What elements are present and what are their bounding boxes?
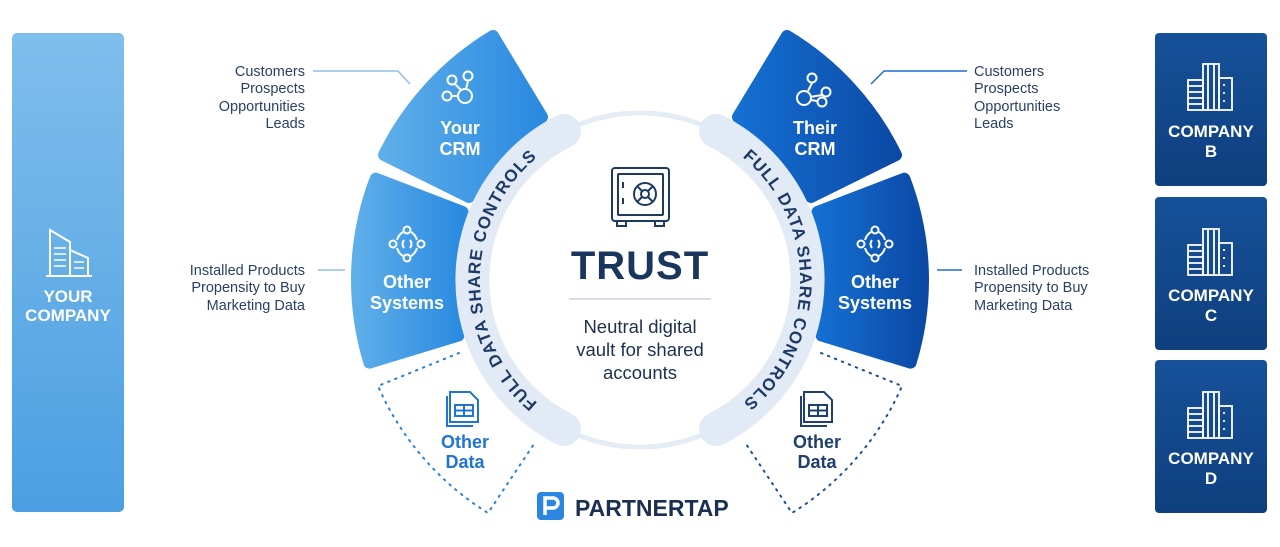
text: vault description [576, 316, 704, 383]
text: left systems data list: Marketing Data [207, 298, 306, 314]
icon: data sheet left [447, 392, 478, 426]
panel: company B: COMPANY [1168, 122, 1254, 141]
panel: their other systems petal: Systems [838, 293, 912, 313]
panel: your CRM petal [384, 36, 542, 197]
icon: systems right [858, 226, 892, 262]
panel: their CRM petal: CRM [794, 139, 836, 159]
panel: company B: B [1205, 142, 1217, 161]
text: right systems data list [974, 263, 1089, 314]
arrow: left systems connector [318, 269, 345, 271]
text: vault description: accounts [603, 362, 677, 383]
panel: company D: D [1205, 469, 1217, 488]
panel: their other systems petal [818, 179, 923, 363]
band: left full data share controls: FULL DATA SHARE CONTROLS [468, 150, 537, 412]
panel: company C: C [1205, 306, 1217, 325]
icon: building your company [46, 230, 92, 276]
panel: your other systems petal [357, 179, 462, 363]
text: right systems data list: Propensity to Buy [974, 280, 1088, 296]
icon: network your CRM [442, 72, 472, 103]
panel: company D: COMPANY [1168, 449, 1254, 468]
text: left systems data list: Propensity to Buy [191, 280, 306, 296]
text: left CRM data list: Opportunities [219, 99, 305, 115]
text: left CRM data list: Customers [235, 64, 305, 80]
arrow: right systems connector [937, 269, 962, 271]
text: vault description: vault for shared [576, 339, 704, 360]
icon: building C [1188, 229, 1232, 275]
text: left systems data list [190, 263, 306, 314]
panel: your company: COMPANY [25, 306, 111, 325]
panel: company C: COMPANY [1168, 286, 1254, 305]
text: left CRM data list: Prospects [241, 81, 305, 97]
panel: your CRM petal: Your [440, 118, 480, 138]
panel: your other data dotted: Data [445, 452, 485, 472]
title: TRUST: TRUST [571, 244, 709, 288]
panel: your other systems petal: Other [383, 272, 431, 292]
panel: your company [12, 33, 124, 512]
band: right full data share controls: FULL DATA SHARE CONTROLS [743, 148, 812, 410]
panel: their other data dotted: Other [793, 432, 841, 452]
icon: data sheet right [801, 392, 832, 426]
icon: building D [1188, 392, 1232, 438]
text: right systems data list: Marketing Data [974, 298, 1073, 314]
text: right CRM data list: Customers [974, 64, 1044, 80]
text: left CRM data list [219, 64, 305, 132]
text: left systems data list: Installed Products [190, 263, 305, 279]
icon: systems left [390, 226, 424, 262]
panel: company B [1155, 33, 1267, 186]
panel: your other data dotted [378, 353, 534, 513]
panel: trust circle [455, 110, 825, 450]
icon: network their CRM [797, 74, 830, 106]
panel: your CRM petal: CRM [440, 139, 480, 159]
text: vault description: Neutral digital [583, 316, 697, 337]
text: right CRM data list: Prospects [974, 81, 1038, 97]
panel: their other systems petal: Other [851, 272, 899, 292]
logo: partnertap: PARTNERTAP [575, 495, 729, 521]
text: right systems data list: Installed Products [974, 263, 1089, 279]
panel: their CRM petal [738, 36, 896, 197]
panel: their CRM petal: Their [793, 118, 837, 138]
text: right CRM data list [974, 64, 1060, 132]
icon: safe [612, 168, 669, 226]
panel: their other data dotted: Data [797, 452, 837, 472]
text: right CRM data list: Opportunities [974, 99, 1060, 115]
arrow: right CRM connector [871, 71, 967, 84]
text: your company: YOUR [43, 287, 93, 306]
panel: your other systems petal: Systems [370, 293, 444, 313]
panel: their other data dotted [746, 353, 902, 513]
band: right full data share controls [699, 114, 825, 446]
text: right CRM data list: Leads [974, 116, 1014, 132]
icon: building B [1188, 64, 1232, 110]
panel: company C [1155, 197, 1267, 350]
arrow: left CRM connector [313, 71, 410, 84]
band: left full data share controls [455, 114, 581, 446]
text: left CRM data list: Leads [265, 116, 305, 132]
panel: company D [1155, 360, 1267, 513]
panel: your other data dotted: Other [441, 432, 489, 452]
